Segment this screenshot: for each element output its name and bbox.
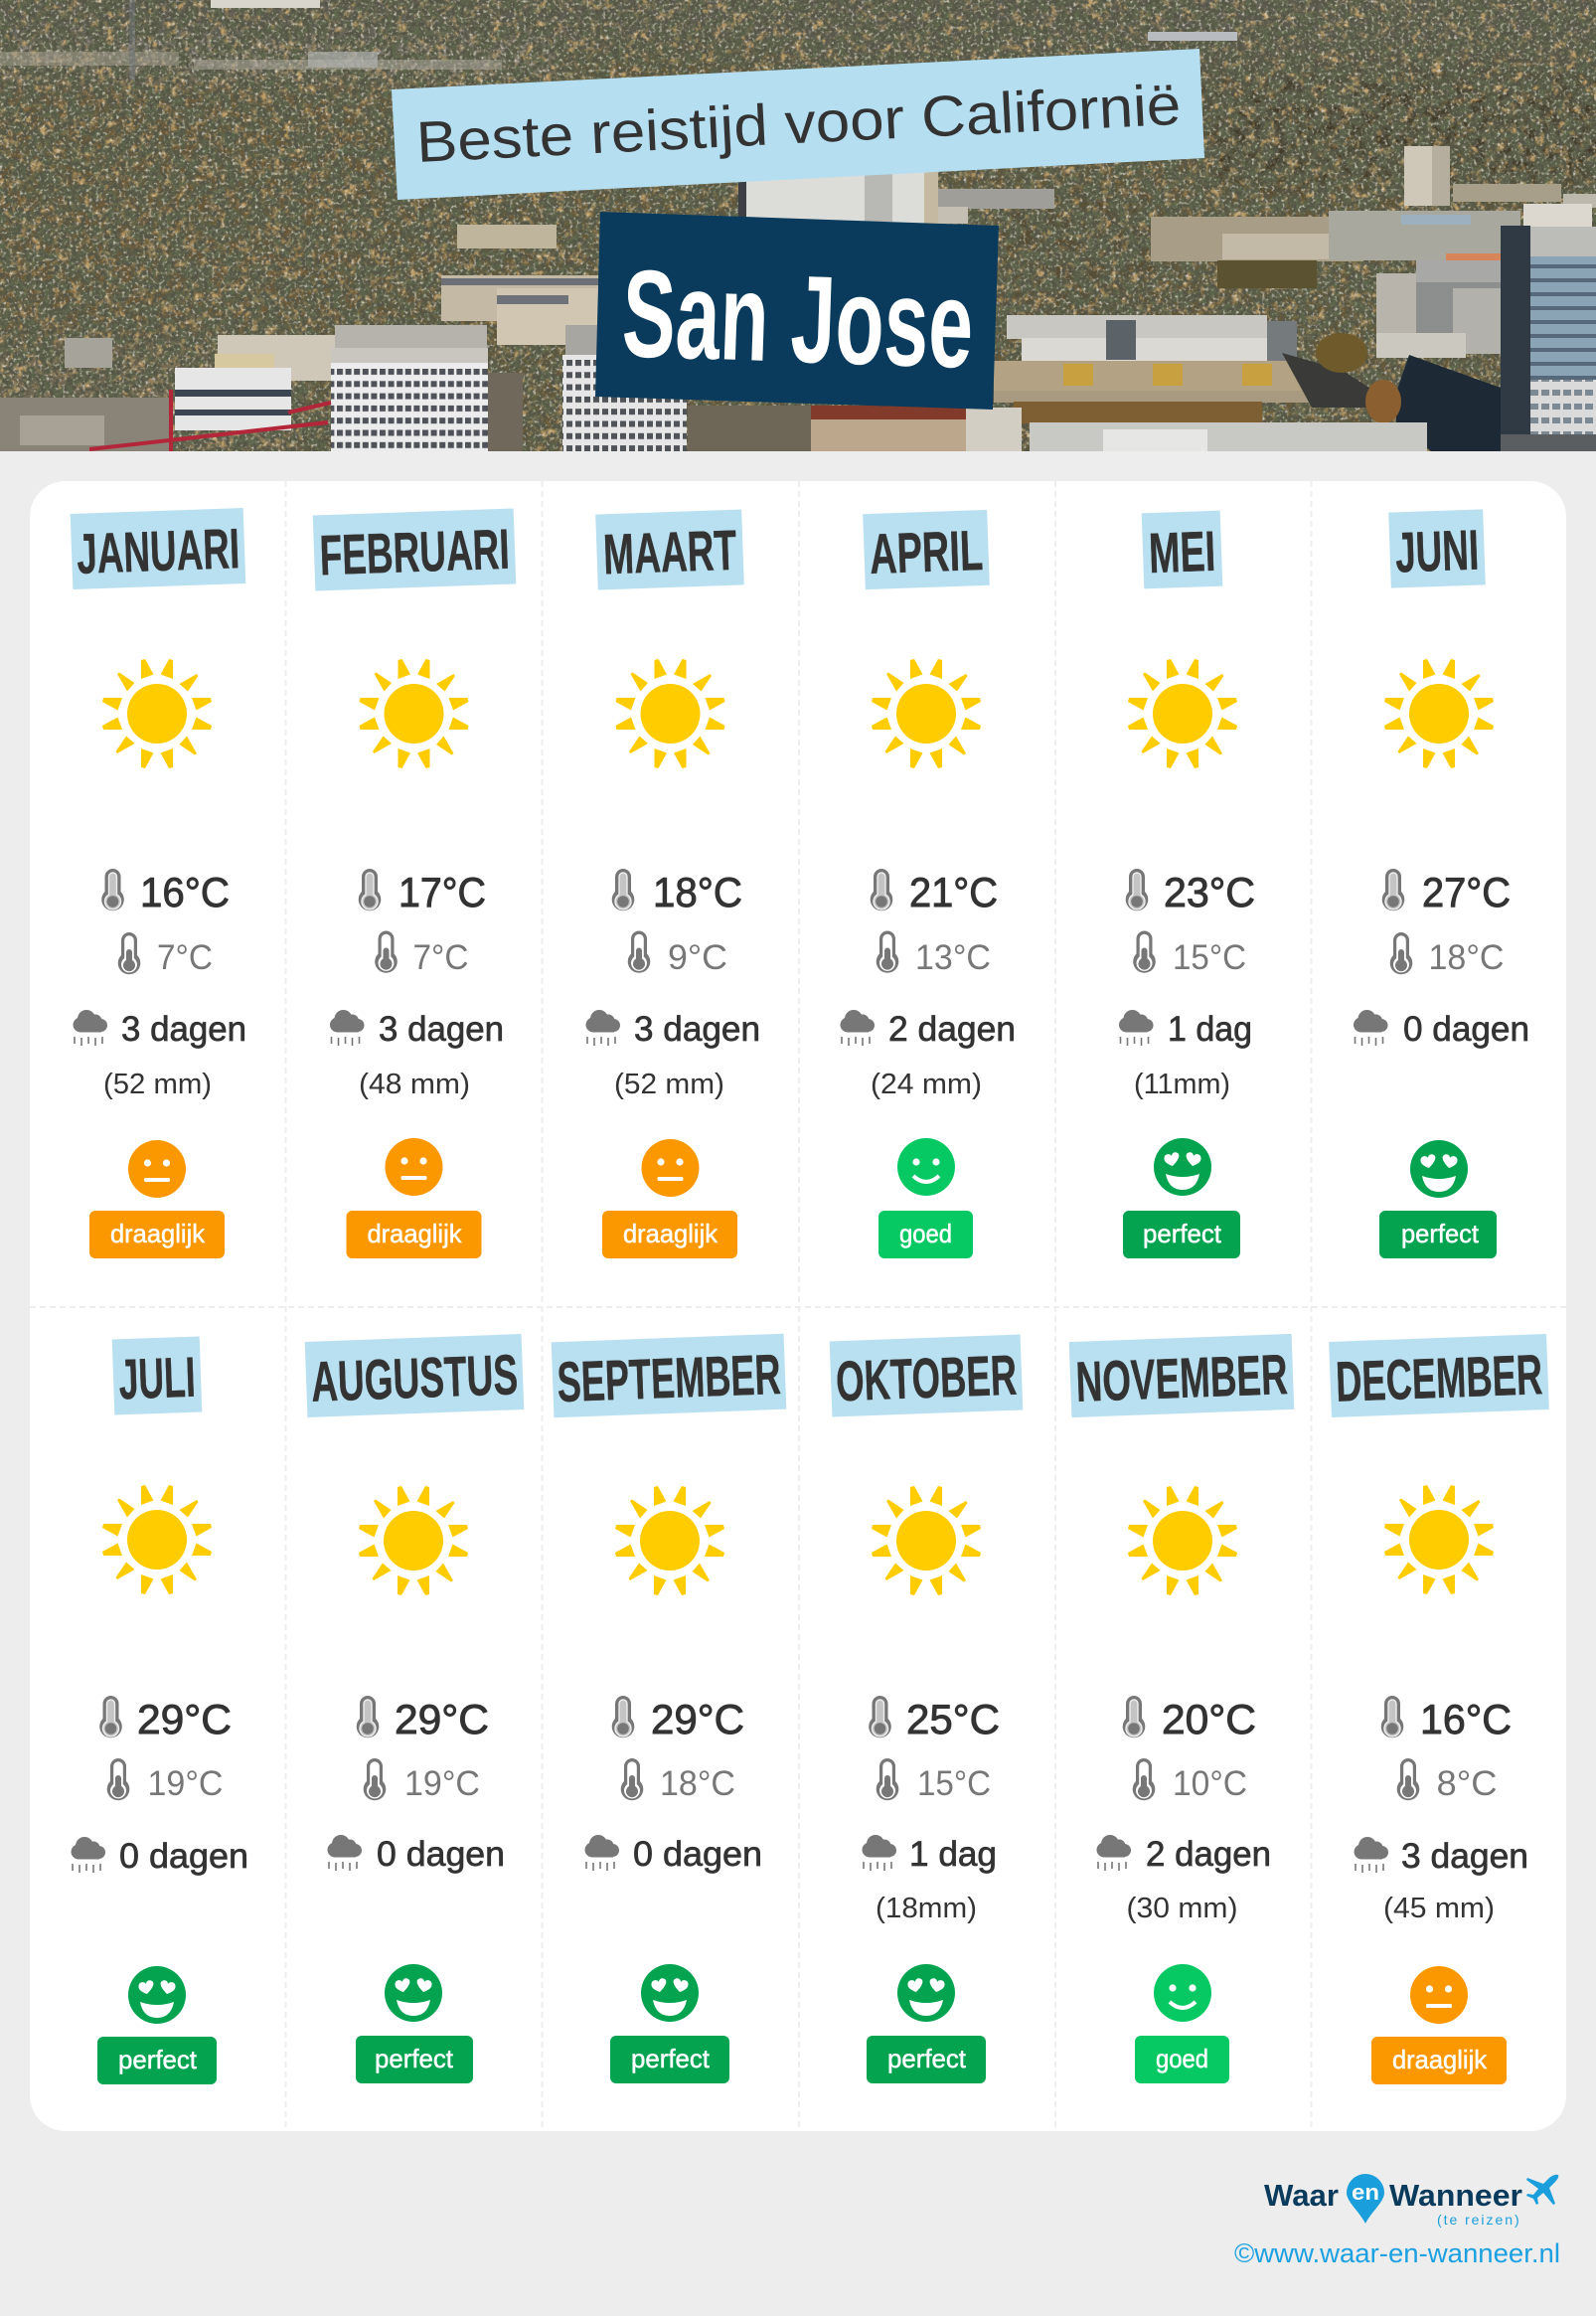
label mei: [1142, 511, 1222, 588]
label november: NOVEMBER: [1075, 1343, 1289, 1414]
rating badge: [89, 1211, 225, 1258]
icon: sun: [1384, 659, 1494, 768]
rating badge: goed: [1156, 2044, 1208, 2073]
month: maart: [586, 509, 760, 1258]
month: december: [1329, 1334, 1549, 2084]
rating badge: goed: [899, 1219, 952, 1248]
icon: sun: [1384, 1485, 1494, 1594]
rainfall: (52 mm): [614, 1069, 724, 1100]
rain days: 3 dagen: [634, 1010, 760, 1049]
label juni: JUNI: [1394, 519, 1480, 584]
rainfall: (52 mm): [103, 1069, 212, 1100]
rain days: [1119, 1010, 1252, 1049]
label februari: FEBRUARI: [319, 518, 511, 587]
max temperature: 16°C: [1420, 1696, 1512, 1742]
icon: happy face: [897, 1138, 955, 1196]
icon: love-eyes face: [1154, 1138, 1211, 1196]
min temperature: 15°C: [1173, 938, 1246, 977]
max temperature: 27°C: [1422, 869, 1511, 915]
white building behind title: [565, 325, 597, 357]
max temperature: 29°C: [651, 1696, 744, 1742]
glass tower: [1523, 204, 1592, 234]
max temperature: [101, 869, 230, 915]
header photo: San Jose skyline: [0, 0, 1596, 497]
max temperature: [1382, 869, 1511, 915]
rating badge: draaglijk: [110, 1219, 206, 1248]
min temperature: [628, 930, 727, 977]
icon: sun: [102, 1485, 212, 1594]
label augustus: [305, 1334, 524, 1417]
min temperature: 15°C: [917, 1764, 991, 1803]
icon: sun: [1128, 1486, 1237, 1595]
rain days: 3 dagen: [121, 1010, 246, 1049]
red crane: [89, 390, 331, 451]
rainfall: (24 mm): [871, 1069, 982, 1100]
month: oktober: [830, 1335, 1023, 2083]
rain days: 3 dagen: [1401, 1837, 1528, 1876]
distant strips: [0, 52, 179, 66]
rain days: 0 dagen: [1403, 1010, 1529, 1049]
rating badge: [97, 2037, 217, 2084]
min temperature: [364, 1758, 480, 1803]
max temperature: [1381, 1696, 1512, 1742]
low-rise left bottom: [0, 398, 169, 451]
min temperature: [1133, 1758, 1247, 1803]
month: februari: [313, 508, 516, 1258]
min temperature: 9°C: [668, 938, 727, 977]
footer logo: Waar en Wanneer: Wanneer: [1389, 2178, 1522, 2213]
icon: airplane: [1526, 2175, 1558, 2205]
min temperature: [375, 930, 469, 977]
rating badge: perfect: [118, 2045, 198, 2074]
rain days: 1 dag: [909, 1835, 997, 1874]
icon: happy face: [1154, 1964, 1211, 2022]
label juli: JULI: [118, 1346, 197, 1411]
rating badge: perfect: [1401, 1219, 1480, 1248]
title banner: Beste reistijd voor Californië: [392, 49, 1204, 200]
icon: love-eyes face: [897, 1964, 955, 2022]
footer logo: Waar en Wanneer: Waar: [1264, 2178, 1339, 2213]
label september: SEPTEMBER: [557, 1343, 782, 1414]
label november: [1069, 1334, 1294, 1417]
min temperature: [107, 1758, 223, 1803]
label augustus: AUGUSTUS: [310, 1343, 519, 1414]
rating badge: [867, 2036, 986, 2083]
right-hand buildings: [1404, 146, 1450, 206]
tower above title: [738, 172, 938, 227]
icon: sun: [616, 659, 725, 768]
title banner: San Jose: [595, 212, 999, 410]
icon: love-eyes face: [1410, 1140, 1468, 1198]
min temperature: 13°C: [915, 938, 991, 977]
footer logo: Waar en Wanneer: [1264, 2174, 1558, 2228]
icon: love-eyes face: [641, 1964, 699, 2022]
icon: sun: [872, 659, 981, 768]
month: april: [841, 510, 1016, 1258]
icon: sun: [615, 1486, 724, 1595]
min temperature: [877, 1758, 991, 1803]
rating badge: [602, 1211, 737, 1258]
rain days: 1 dag: [1168, 1010, 1252, 1049]
month: september: [552, 1334, 786, 2083]
label maart: [595, 509, 744, 590]
icon: sun: [102, 659, 212, 768]
title banner: Beste reistijd voor Californië: Beste reistijd voor Californië: [414, 73, 1183, 175]
rating badge: perfect: [375, 2044, 454, 2073]
rating badge: perfect: [887, 2044, 967, 2073]
icon: sun: [872, 1486, 981, 1595]
max temperature: [1126, 869, 1255, 915]
min temperature: 10°C: [1173, 1764, 1247, 1803]
rating badge: [1123, 1211, 1240, 1258]
white low building complex: [1007, 315, 1267, 339]
icon: love-eyes face: [385, 1964, 442, 2022]
label mei: MEI: [1148, 520, 1216, 585]
month: augustus: [305, 1334, 524, 2083]
rating badge: [878, 1211, 973, 1258]
icon: neutral face: [386, 1138, 443, 1196]
rating badge: draaglijk: [368, 1219, 462, 1248]
label september: [552, 1334, 786, 1417]
rainfall: (48 mm): [359, 1069, 470, 1100]
large white building: [335, 325, 487, 363]
min temperature: 7°C: [413, 938, 469, 977]
max temperature: [871, 869, 998, 915]
month: juli: [72, 1336, 248, 2084]
rain days: 3 dagen: [379, 1010, 504, 1049]
icon: location pin: [1347, 2174, 1384, 2224]
autumn tree row: [1014, 402, 1262, 423]
min temperature: 18°C: [660, 1764, 735, 1803]
min temperature: [1397, 1758, 1497, 1803]
rainfall: (45 mm): [1383, 1893, 1495, 1924]
rating badge: [1371, 2037, 1507, 2084]
bottom row buildings: [1030, 422, 1427, 451]
max temperature: 25°C: [906, 1696, 1000, 1742]
icon: sun: [1128, 659, 1237, 768]
min temperature: 8°C: [1437, 1764, 1497, 1803]
rain days: [863, 1835, 997, 1874]
max temperature: 18°C: [653, 869, 742, 915]
rain days: 2 dagen: [1146, 1835, 1271, 1874]
rain days: 2 dagen: [888, 1010, 1016, 1049]
label januari: JANUARI: [76, 517, 240, 586]
label januari: [71, 508, 245, 589]
label maart: MAART: [602, 519, 737, 586]
label juli: [112, 1336, 202, 1415]
icon: location pin: en: [1352, 2180, 1379, 2205]
panel: months calendar: [30, 481, 1566, 2131]
min temperature: 19°C: [147, 1764, 223, 1803]
rainfall: (18mm): [876, 1893, 977, 1924]
rainfall: (30 mm): [1127, 1893, 1238, 1924]
max temperature: [612, 869, 742, 915]
max temperature: 17°C: [399, 869, 486, 915]
dark shadow tower base: [1396, 355, 1501, 451]
rating badge: [610, 2036, 729, 2083]
label april: APRIL: [869, 519, 984, 586]
rating badge: [346, 1211, 481, 1258]
rating badge: [1135, 2036, 1229, 2083]
max temperature: 23°C: [1164, 869, 1255, 915]
max temperature: 21°C: [909, 869, 998, 915]
min temperature: 19°C: [404, 1764, 480, 1803]
label februari: [313, 508, 516, 591]
icon: neutral face: [1410, 1966, 1468, 2024]
label juni: [1388, 509, 1486, 588]
icon: love-eyes face: [128, 1966, 186, 2024]
rating badge: draaglijk: [1392, 2045, 1488, 2074]
max temperature: [359, 869, 486, 915]
max temperature: 29°C: [137, 1696, 232, 1742]
min temperature: [621, 1758, 735, 1803]
rainfall: (11mm): [1134, 1069, 1230, 1100]
rain days: 0 dagen: [377, 1835, 505, 1874]
rain days: 0 dagen: [119, 1837, 248, 1876]
max temperature: [1123, 1696, 1256, 1742]
month: november: [1069, 1334, 1294, 2083]
max temperature: 16°C: [140, 869, 230, 915]
month: januari: [71, 508, 246, 1258]
icon: neutral face: [128, 1140, 186, 1198]
rating badge: perfect: [631, 2044, 711, 2073]
max temperature: 29°C: [395, 1696, 489, 1742]
title banner: San Jose: San Jose: [620, 245, 976, 395]
min temperature: [118, 932, 213, 977]
icon: neutral face: [642, 1139, 700, 1197]
month: mei: [1119, 511, 1255, 1258]
min temperature: [1133, 930, 1246, 977]
icon: sun: [359, 1486, 468, 1595]
footer logo: Waar en Wanneer: (te reizen): [1437, 2212, 1521, 2228]
footer website link: ©www.waar-en-wanneer.nl: [1234, 2238, 1560, 2268]
label april: [863, 510, 990, 589]
rain days: 0 dagen: [633, 1835, 762, 1874]
rating badge: [356, 2036, 473, 2083]
icon: sun: [360, 659, 469, 768]
rating badge: draaglijk: [623, 1219, 718, 1248]
max temperature: 20°C: [1162, 1696, 1256, 1742]
label oktober: OKTOBER: [835, 1344, 1018, 1413]
label oktober: [830, 1335, 1023, 1416]
beige buildings: [441, 275, 598, 321]
min temperature: [877, 930, 991, 977]
month: juni: [1354, 509, 1529, 1258]
min temperature: 18°C: [1429, 938, 1505, 977]
min temperature: [1390, 932, 1505, 977]
rating badge: perfect: [1143, 1219, 1222, 1248]
rating badge: [1379, 1211, 1497, 1258]
min temperature: 7°C: [157, 938, 213, 977]
